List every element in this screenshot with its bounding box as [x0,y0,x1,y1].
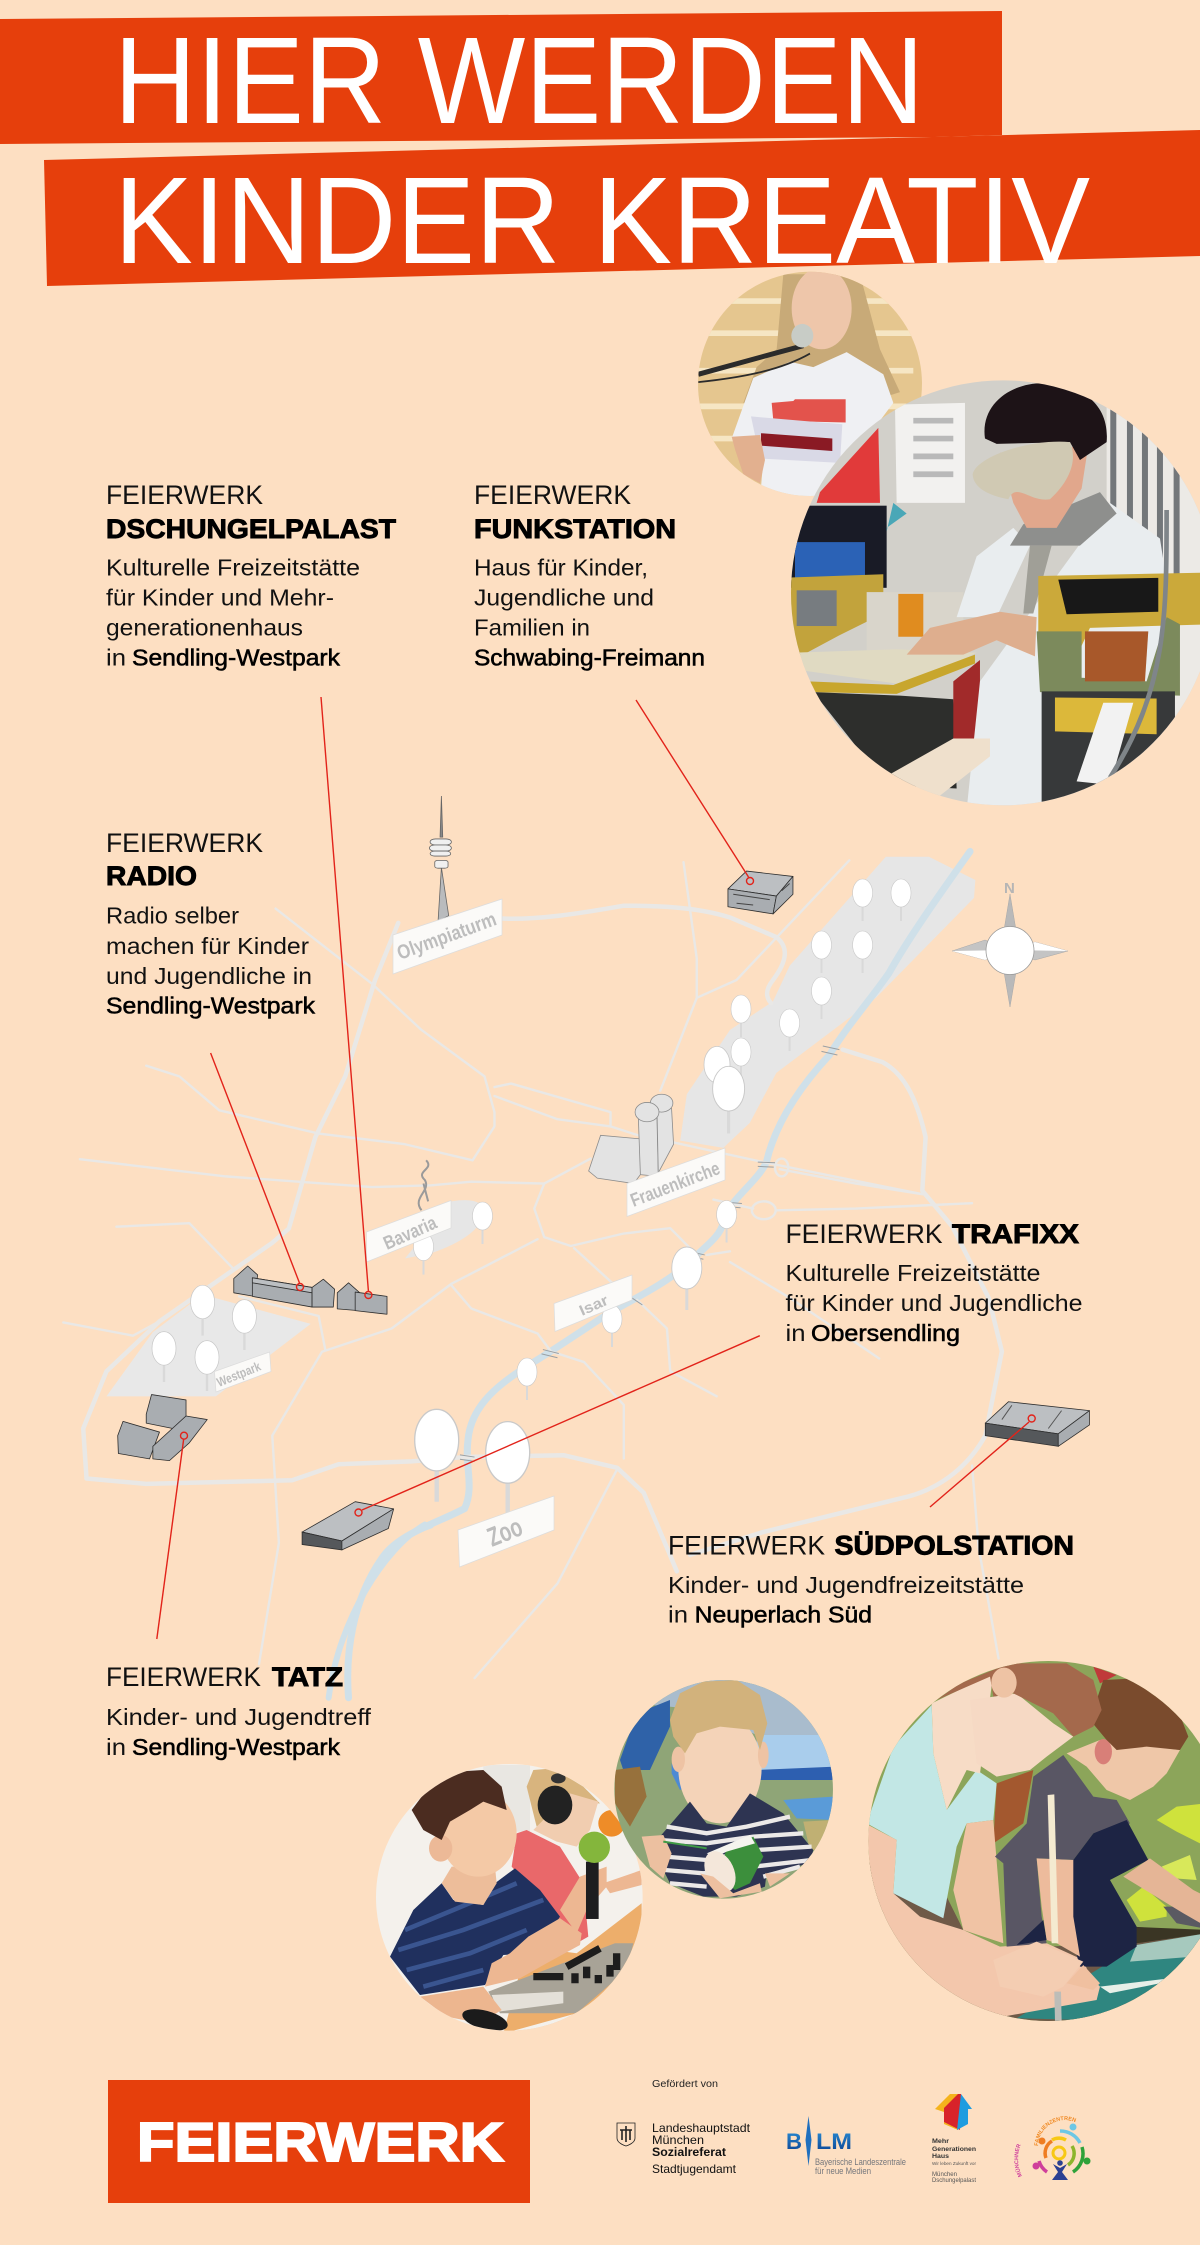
logo: Landeshauptstadt Muenchen: Landeshauptstadt [652,2121,751,2135]
logo: Mehrgenerationenhaus [932,2094,977,2184]
text: Dschungelpalast: in [106,645,126,671]
text: Radio: Radio selber [106,903,239,929]
photo: girl at microphone [698,272,922,496]
text: Tatz [106,1662,372,1760]
logo: Muenchner Familienzentren: MÜNCHNER [1014,2144,1022,2178]
text: Tatz: FEIERWERK [106,1662,261,1692]
label: Bavaria [366,1200,451,1262]
funded by: Gefördert von [652,2079,718,2090]
text: Suedpolstation: Kinder- und Jugendfreizeitstätte [668,1572,1024,1598]
logo: BLM: Bayerische Landeszentrale [815,2157,906,2167]
logo: BLM [786,2116,906,2176]
label: Isar: Isar [577,1292,611,1320]
text: Suedpolstation: SÜDPOLSTATION [834,1531,1074,1561]
text: Suedpolstation: FEIERWERK [668,1531,825,1561]
label: Zoo: Zoo [483,1512,527,1553]
compass: N [1004,880,1015,897]
church: Frauenkirche [589,1094,674,1184]
logo: Landeshauptstadt Muenchen [617,2121,751,2176]
logo: Mehrgenerationenhaus: Haus [932,2153,949,2160]
Olympiaturm tower [429,796,451,921]
connector lines [157,697,1035,1639]
text: Radio: FEIERWERK [106,828,263,858]
trees [152,879,911,1514]
text: Radio: Sendling-Westpark [106,993,316,1019]
photo: children drawing with chalk [860,1657,1200,2027]
building: Suedpolstation [985,1402,1089,1446]
text: Funkstation: Schwabing-Freimann [474,645,705,671]
text: Funkstation: Familien in [474,615,590,641]
logo: BLM: LM [816,2129,852,2154]
photo: boy at scroll saw [791,380,1200,806]
text: Trafixx: für Kinder und Jugendliche [786,1290,1082,1316]
title: HIER WERDEN [114,13,924,150]
text: Trafixx: Obersendling [811,1320,960,1346]
logo: Mehrgenerationenhaus: Wir leben Zukunft vor [932,2161,977,2166]
building: Tatz [118,1395,207,1461]
text: Radio [106,828,316,1019]
label: Isar [554,1275,632,1332]
text: Trafixx [786,1219,1082,1346]
Bavaria statue [419,1160,428,1210]
bridges [460,1046,839,1461]
text: Dschungelpalast: FEIERWERK [106,480,263,510]
label: Bavaria: Bavaria [380,1212,441,1255]
text: Dschungelpalast: DSCHUNGELPALAST [106,514,397,544]
text: Dschungelpalast: Sendling-Westpark [132,645,341,671]
label: Frauenkirche: Frauenkirche [628,1158,723,1212]
building: Funkstation [728,871,793,914]
logo: Muenchner Familienzentren: FAMILIENZENTREN [1034,2116,1076,2146]
text: Funkstation: Jugendliche und [474,585,654,611]
photo: boy painting a cup [610,1677,837,1903]
map of Munich [63,697,1089,1698]
text: Dschungelpalast: generationenhaus [106,615,303,641]
logo: Landeshauptstadt Muenchen: München [652,2133,704,2147]
label: Olympiaturm: Olympiaturm [394,908,499,965]
roads [63,860,1002,1678]
logo: Mehrgenerationenhaus: Dschungelpalast [932,2178,976,2184]
text: Radio: und Jugendliche in [106,963,312,989]
photo: boy at mixing desk [370,1760,647,2037]
text: Suedpolstation: Neuperlach Süd [695,1602,872,1628]
park: Englischer Garten [680,857,975,1148]
logo: Landeshauptstadt Muenchen: Stadtjugendamt [652,2162,737,2176]
logo: BLM: für neue Medien [815,2166,871,2176]
place labels [214,899,725,1567]
building: Dschungelpalast and Radio [234,1266,387,1314]
text: Tatz: Kinder- und Jugendtreff [106,1704,372,1730]
text: Funkstation: FEIERWERK [474,480,631,510]
logo: Landeshauptstadt Muenchen: Sozialreferat [652,2145,726,2159]
text: Funkstation: FUNKSTATION [474,514,676,544]
title: KINDER KREATIV [114,153,1090,290]
park: Bavaria [405,1200,485,1259]
text: Suedpolstation [668,1531,1074,1628]
building: Trafixx [302,1502,394,1550]
text: Radio: RADIO [106,861,197,891]
logo: Mehrgenerationenhaus: Mehr [932,2138,950,2145]
text: Funkstation [474,480,705,671]
text: Dschungelpalast [106,480,397,671]
logo: Mehrgenerationenhaus: München [932,2172,957,2178]
park: Westpark [106,1295,311,1396]
text: Suedpolstation: in [668,1602,688,1628]
text: Trafixx: FEIERWERK [786,1219,942,1249]
text: Trafixx: Kulturelle Freizeitstätte [786,1260,1040,1286]
text: Trafixx: TRAFIXX [952,1219,1079,1249]
text: Dschungelpalast: für Kinder und Mehr- [106,585,334,611]
river Isar [329,851,970,1698]
text: Funkstation: Haus für Kinder, [474,555,648,581]
text: Tatz: TATZ [272,1662,343,1692]
text: Tatz: Sendling-Westpark [132,1734,341,1760]
logo: FEIERWERK: FEIERWERK [137,2111,504,2173]
label: Westpark: Westpark [215,1358,263,1390]
title [0,11,1200,290]
text: Trafixx: in [786,1320,806,1346]
compass [952,880,1068,1007]
label: Zoo [458,1496,554,1567]
text: Radio: machen für Kinder [106,933,309,959]
text: Dschungelpalast: Kulturelle Freizeitstätte [106,555,360,581]
logo: Muenchner Familienzentren [1014,2116,1090,2180]
text: Tatz: in [106,1734,126,1760]
logo: FEIERWERK [108,2080,530,2203]
logo: Mehrgenerationenhaus: Generationen [932,2146,976,2153]
logo: BLM: B [786,2129,802,2154]
